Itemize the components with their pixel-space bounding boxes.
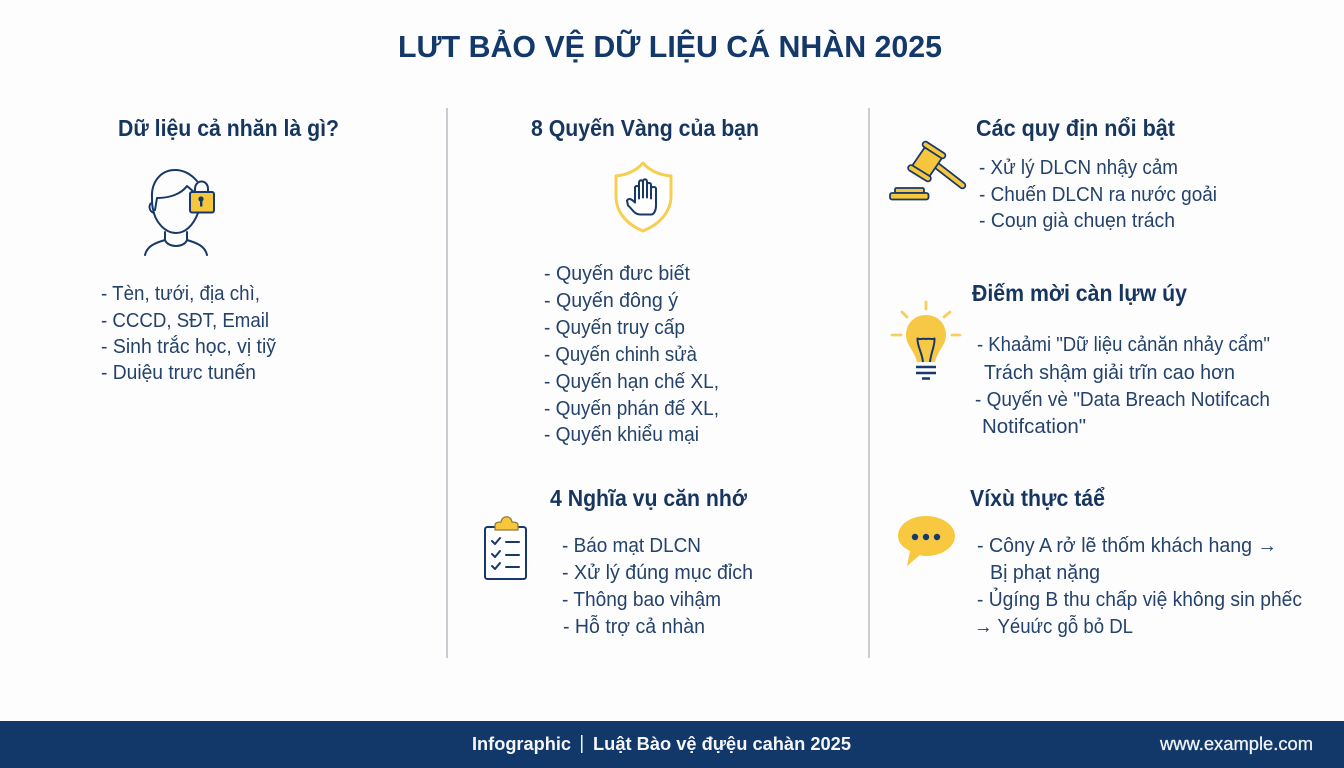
list: 4 obligations: - Hỗ trợ cả nhàn: [563, 615, 705, 638]
list: key regulations: - Coụn già chuẹn trách: [979, 210, 1175, 232]
panel: new points: [892, 280, 1270, 438]
list: personal data: - Tèn, tưới, địa chì,: [101, 283, 260, 305]
list: real examples: Bị phạt nặng: [990, 562, 1100, 584]
footer caption: Infographic: [472, 734, 571, 754]
list: 4 obligations: - Thông bao vihậm: [562, 589, 721, 611]
heading: real examples: Víxù thực táể: [970, 485, 1105, 511]
list: new points: Notifcation": [982, 416, 1086, 438]
list: new points: - Khaảmi "Dữ liệu cảnăn nhảy cẩm": [977, 334, 1270, 356]
list: 8 rights: - Quyến phán đế XL,: [544, 398, 719, 420]
heading: personal data: Dữ liệu cả nhăn là gì?: [118, 115, 339, 141]
list: 8 rights: - Quyến đưc biết: [544, 263, 690, 285]
list: 4 obligations: - Báo mạt DLCN: [562, 535, 701, 557]
list: 4 obligations: [562, 535, 753, 638]
footer caption: Luật Bào vệ đựệu cahàn 2025: [593, 734, 851, 754]
list: real examples: - Ủgíng B thu chấp việ không sin phếc: [977, 587, 1302, 611]
list: personal data: - Duiệu trưc tunến: [101, 362, 256, 384]
footer bar: [0, 721, 1344, 768]
icon: light bulb: [892, 302, 960, 378]
icon: gavel: [890, 144, 962, 200]
title: LƯT BẢO VỆ DỮ LIỆU CÁ NHÀN 2025: [398, 28, 942, 64]
list: 8 rights: - Quyến truy cấp: [544, 317, 685, 339]
heading: 4 obligations: 4 Nghĩa vụ căn nhớ: [550, 485, 748, 511]
list: real examples: [974, 535, 1302, 638]
icon: person with padlock: [145, 170, 214, 255]
panel: real examples: [898, 485, 1302, 638]
list: real examples: - Côny A rở lẽ thốm khách hang →: [977, 535, 1277, 557]
list: new points: - Quyến vè "Data Breach Notifcach: [975, 389, 1270, 411]
panel: key regulations: [890, 115, 1217, 232]
heading: new points: Điếm mời càn lựw úy: [972, 280, 1187, 306]
panel: personal data: [101, 115, 339, 384]
footer url: www.example.com: [1159, 734, 1313, 754]
list: personal data: - Sinh trắc học, vị tiỹ: [101, 335, 276, 358]
heading: 8 rights: 8 Quyến Vàng của bạn: [531, 115, 759, 141]
list: 4 obligations: - Xử lý đúng mục đỉch: [562, 562, 753, 584]
list: new points: Trách shậm giải trĩn cao hơn: [984, 362, 1235, 384]
heading: key regulations: Các quy địn nổi bật: [976, 115, 1175, 141]
list: personal data: - CCCD, SĐT, Email: [101, 310, 269, 332]
list: key regulations: - Chuến DLCN ra nước goải: [979, 184, 1217, 206]
list: key regulations: - Xử lý DLCN nhậy cảm: [979, 157, 1178, 179]
icon: shield with hand: [616, 163, 671, 231]
list: real examples: → Yéuức gỗ bỏ DL: [974, 615, 1133, 638]
icon: speech bubble: [898, 516, 955, 566]
list: 8 rights: - Quyến chinh sửà: [544, 344, 698, 366]
list: new points: [975, 334, 1270, 438]
list: 8 rights: - Quyến khiểu mại: [544, 424, 699, 446]
icon: clipboard checklist: [485, 517, 526, 579]
panel: 4 obligations: [485, 485, 753, 638]
footer caption: [472, 734, 851, 754]
list: personal data: [101, 283, 276, 384]
list: key regulations: [979, 157, 1217, 232]
list: 8 rights: - Quyến đông ý: [544, 290, 678, 312]
list: 8 rights: - Quyến hạn chế XL,: [544, 371, 719, 393]
list: 8 rights: [544, 263, 719, 446]
panel: 8 rights: [531, 115, 759, 446]
